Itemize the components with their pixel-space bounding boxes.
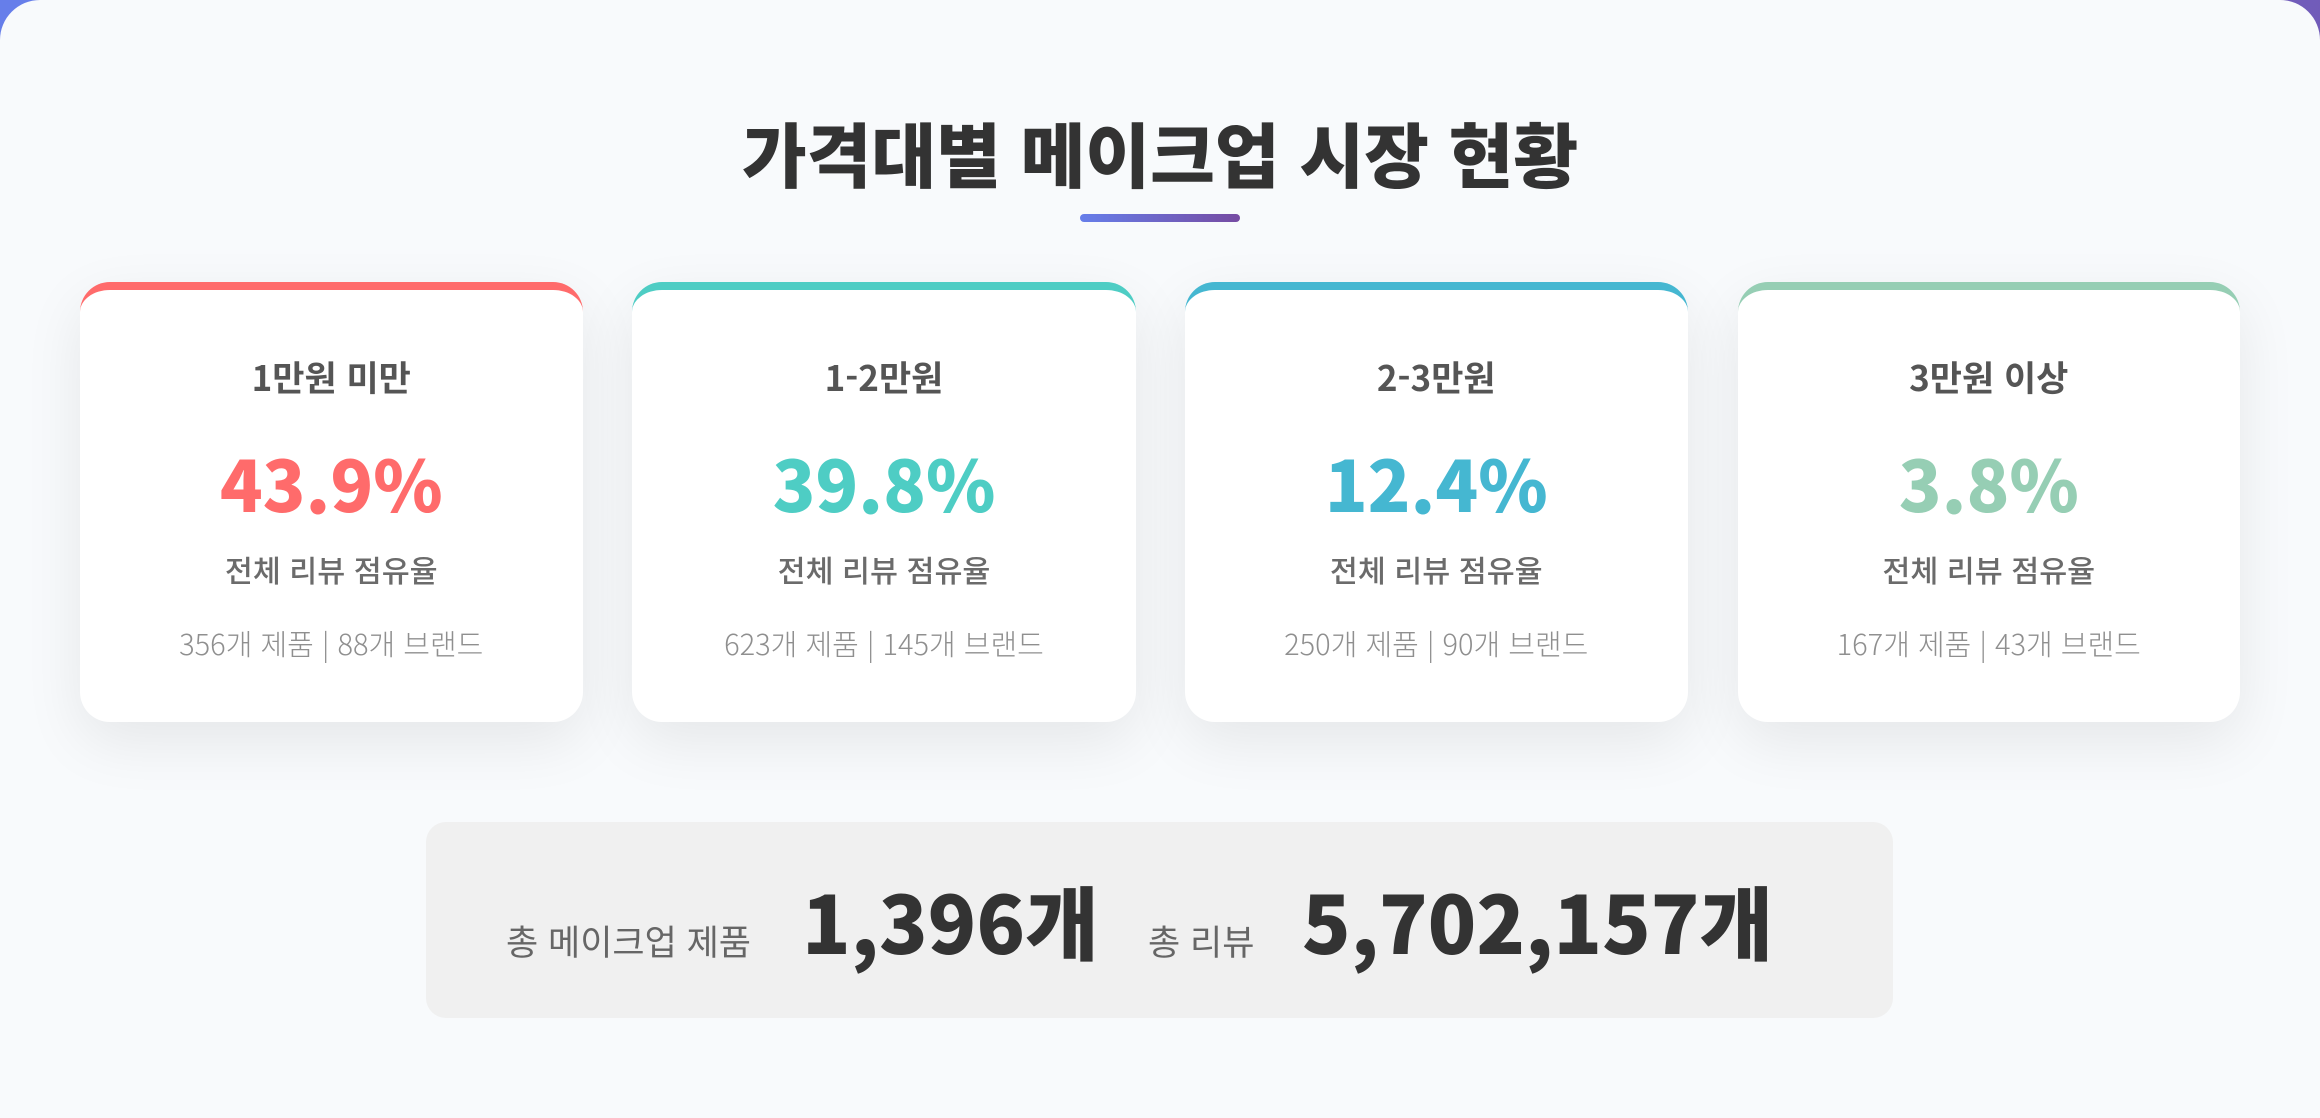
title: 가격대별 메이크업 시장 현황 [742, 101, 1578, 203]
totals panel: 총 메이크업 제품 [506, 915, 751, 966]
card: over 30,000 won [1738, 282, 2240, 722]
card: under 10,000 won: 1만원 미만 [252, 351, 411, 402]
card: 10,000-20,000 won: 39.8% [773, 431, 995, 533]
card: 10,000-20,000 won: 623개 제품 | 145개 브랜드 [724, 622, 1044, 664]
card: under 10,000 won: 356개 제품 | 88개 브랜드 [179, 622, 483, 664]
title underline [1080, 214, 1240, 222]
totals panel: 1,396개 [802, 862, 1099, 978]
card: 20,000-30,000 won: 2-3만원 [1377, 351, 1496, 402]
card: over 30,000 won: 전체 리뷰 점유율 [1882, 547, 2095, 591]
card: 10,000-20,000 won: 전체 리뷰 점유율 [778, 547, 990, 591]
card: 20,000-30,000 won [1185, 282, 1688, 722]
card: over 30,000 won: 3만원 이상 [1909, 351, 2068, 402]
card: 20,000-30,000 won: 전체 리뷰 점유율 [1330, 547, 1543, 591]
totals panel: 5,702,157개 [1302, 862, 1773, 978]
card: under 10,000 won: 전체 리뷰 점유율 [225, 547, 438, 591]
card: over 30,000 won: 3.8% [1899, 431, 2079, 533]
totals panel: 총 리뷰 [1148, 915, 1254, 966]
card: 20,000-30,000 won: 250개 제품 | 90개 브랜드 [1284, 622, 1588, 664]
card: 10,000-20,000 won [632, 282, 1136, 722]
card: under 10,000 won [80, 282, 582, 722]
card: under 10,000 won: 43.9% [220, 431, 443, 533]
totals panel [426, 822, 1893, 1018]
card: over 30,000 won: 167개 제품 | 43개 브랜드 [1837, 622, 2141, 664]
card: 10,000-20,000 won: 1-2만원 [825, 351, 943, 402]
card: 20,000-30,000 won: 12.4% [1325, 431, 1548, 533]
